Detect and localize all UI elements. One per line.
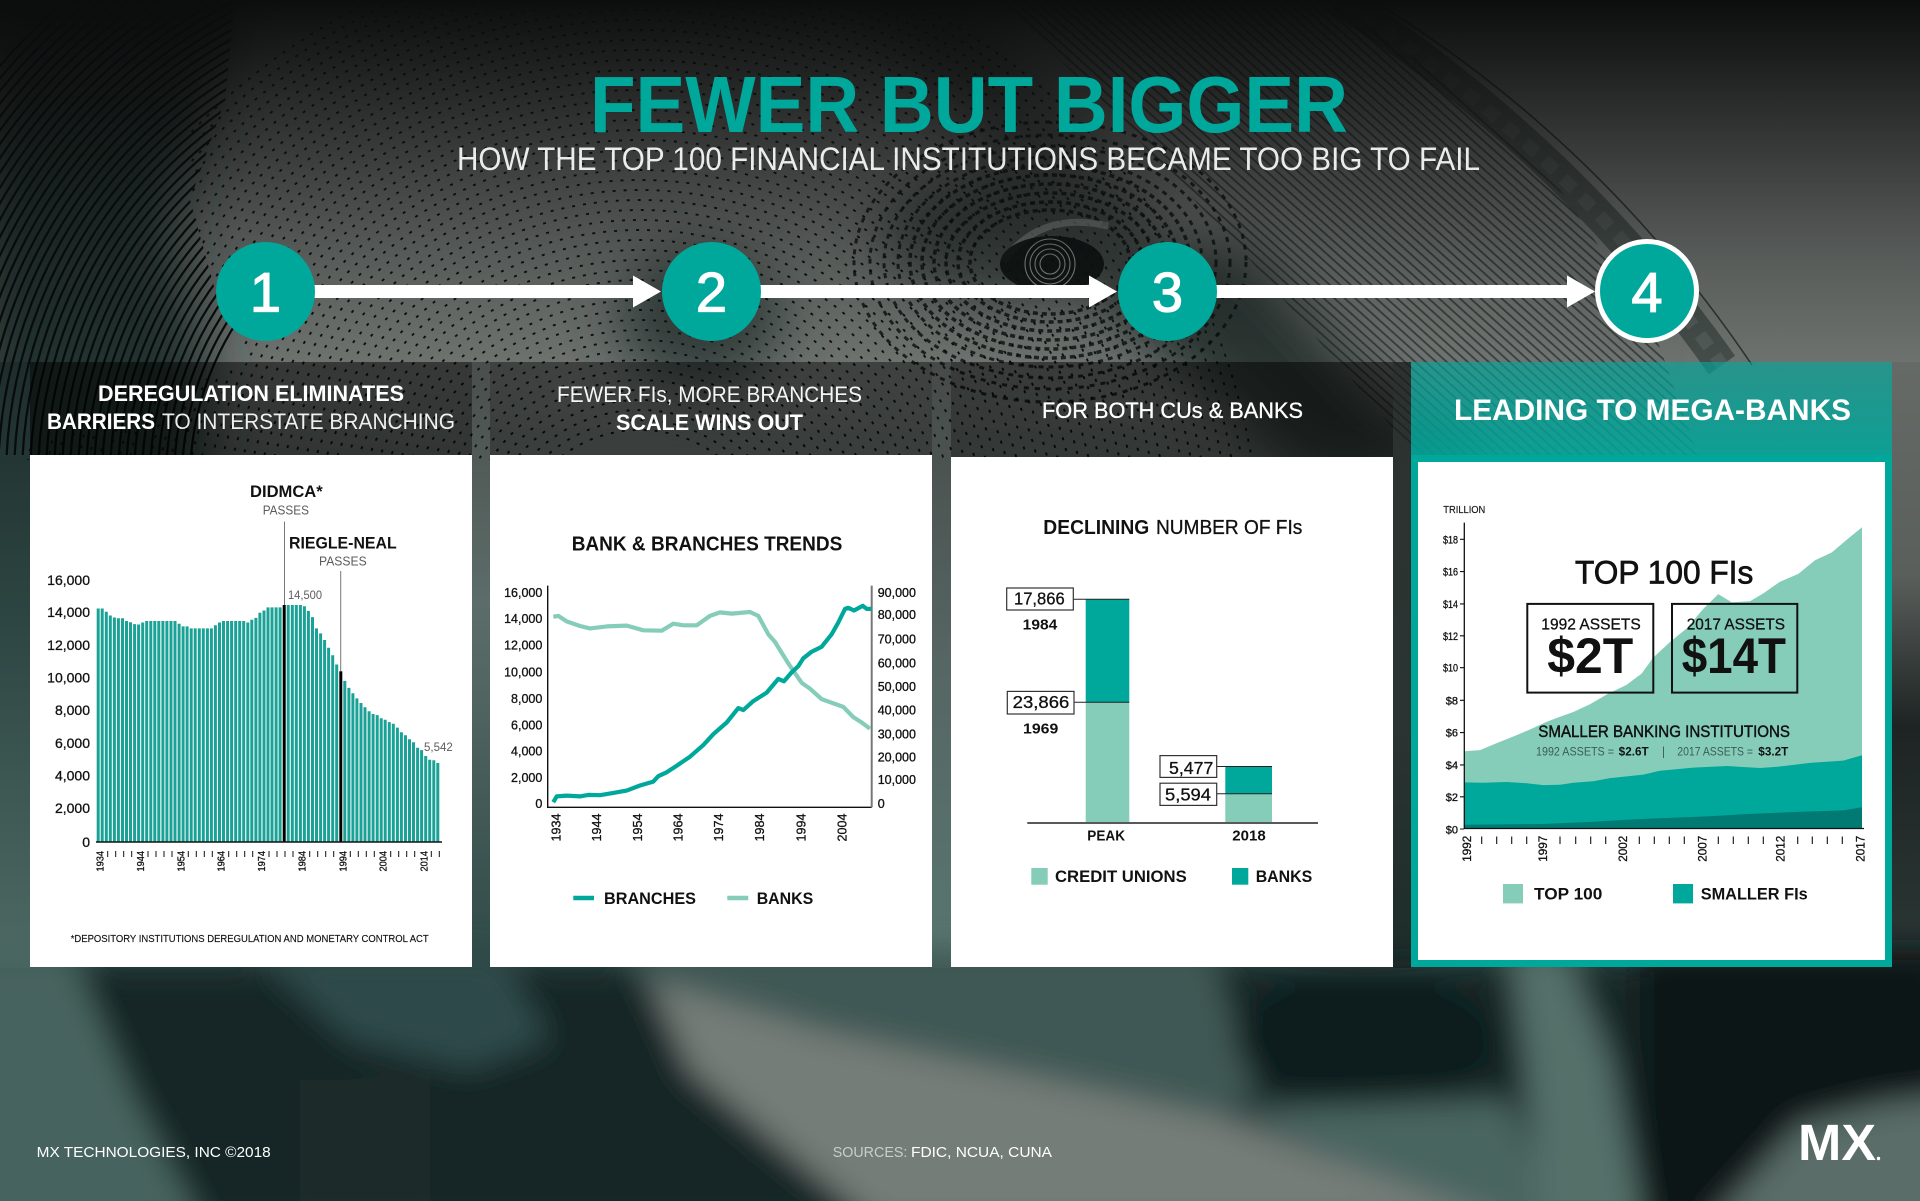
callout: smaller banking institutions: |: [1662, 747, 1665, 759]
step marker 2: 2: [696, 260, 727, 324]
stacked bar chart: declining number of FIs: 5,477: [1169, 758, 1213, 778]
bar chart: number of banks 1934-2018: 1974: [256, 851, 268, 872]
step marker 4: [1598, 242, 1696, 340]
line chart: banks and branches: 1994: [794, 814, 808, 842]
data label: 5,542: 5,542: [424, 740, 453, 754]
stacked bar chart: declining number of FIs: PEAK: [1087, 828, 1125, 844]
bar chart: number of banks 1934-2018: 8,000: [55, 702, 90, 718]
logo: MX: MX: [1798, 1114, 1876, 1171]
line chart: banks and branches: 50,000: [878, 680, 916, 694]
line chart: banks and branches: 0: [535, 797, 542, 811]
chart title: BANK & BRANCHES TRENDS: [572, 534, 842, 556]
line chart: banks and branches: 16,000: [504, 586, 542, 600]
bar chart: number of banks 1934-2018: 1954: [175, 851, 187, 872]
title: FEWER BUT BIGGER: [590, 60, 1348, 149]
line chart: banks and branches: 90,000: [878, 586, 916, 600]
callout: smaller banking institutions: $3.2T: [1758, 747, 1788, 759]
line chart: banks and branches: 14,000: [504, 612, 542, 626]
callout: 2017 assets: $14T: [1682, 628, 1786, 684]
panel 1 heading: DEREGULATION ELIMINATES: [98, 381, 404, 406]
line chart: banks and branches: 60,000: [878, 656, 916, 670]
data label: 14,500: 14,500: [288, 588, 322, 602]
line chart: banks and branches: 12,000: [504, 638, 542, 652]
area chart: assets of top 100 and smaller FIs: 2017: [1854, 835, 1868, 862]
bar chart: number of banks 1934-2018: 10,000: [47, 670, 90, 686]
panel: leading to mega-banks: [1411, 362, 1892, 967]
legend: branches and banks: BANKS: [757, 890, 813, 908]
stacked bar chart: declining number of FIs: 23,866: [1013, 692, 1069, 712]
bar chart: number of banks 1934-2018: 1944: [135, 851, 147, 872]
line chart: banks and branches: 1934: [548, 814, 564, 842]
stacked bar chart: declining number of FIs: 1969: [1023, 721, 1058, 737]
subtitle: HOW THE TOP 100 FINANCIAL INSTITUTIONS BECAME TOO BIG TO FAIL: [457, 141, 1480, 177]
line chart: banks and branches: 1974: [711, 814, 726, 842]
panel 1 heading: BARRIERS: [47, 409, 155, 434]
bar chart: number of banks 1934-2018: 6,000: [55, 735, 90, 751]
line chart: banks and branches: 10,000: [878, 773, 916, 787]
legend: credit unions and banks: BANKS: [1256, 868, 1312, 886]
legend: credit unions and banks: [1031, 868, 1312, 886]
bar chart: number of banks 1934-2018: 12,000: [47, 637, 90, 653]
callout: 1992 assets: 1992 ASSETS: [1541, 616, 1641, 634]
stacked bar chart: declining number of FIs: [1007, 588, 1318, 844]
line chart: banks and branches: 6,000: [511, 718, 542, 732]
callout: smaller banking institutions: [1536, 723, 1790, 759]
panel: fewer FIs, more branches: [490, 362, 932, 967]
callout: DIDMCA passes: DIDMCA*: [250, 483, 323, 501]
bar chart: number of banks 1934-2018: 1994: [337, 851, 349, 872]
stacked bar chart: declining number of FIs: 17,866: [1014, 588, 1065, 608]
stacked bar chart: declining number of FIs: 2018: [1232, 828, 1266, 844]
line chart: banks and branches: 30,000: [878, 728, 916, 742]
area chart: assets of top 100 and smaller FIs: $8: [1446, 695, 1458, 707]
line chart: banks and branches: 1984: [752, 814, 767, 842]
bar chart: number of banks 1934-2018: 1934: [94, 851, 106, 872]
area chart: assets of top 100 and smaller FIs: $12: [1443, 631, 1458, 643]
callout: DIDMCA passes: PASSES: [263, 502, 309, 518]
line chart: banks and branches: 4,000: [511, 744, 542, 758]
area chart: assets of top 100 and smaller FIs: 2007: [1696, 835, 1710, 862]
footer: sources: [833, 1144, 1052, 1161]
bar chart: number of banks 1934-2018: 2004: [378, 851, 390, 872]
bar chart: number of banks 1934-2018: 16,000: [47, 572, 90, 588]
panel: credit unions and banks: [951, 362, 1393, 967]
callout: smaller banking institutions: 2017 ASSETS =: [1677, 747, 1753, 759]
area chart: assets of top 100 and smaller FIs: TRILLION: [1443, 505, 1485, 516]
line chart: banks and branches: 1944: [589, 814, 604, 842]
chart title: NUMBER OF FIs: [1156, 517, 1302, 539]
arrow: step 1 to 2: [314, 276, 661, 308]
bar chart: number of banks 1934-2018: 2014: [418, 851, 430, 872]
footer: sources: SOURCES:: [833, 1144, 907, 1161]
panel 3 heading: FOR BOTH CUs & BANKS: [1042, 398, 1303, 423]
panel 2 heading: [557, 382, 862, 435]
area chart: assets of top 100 and smaller FIs: $6: [1446, 728, 1458, 740]
bar chart: number of banks 1934-2018: 2,000: [55, 800, 90, 816]
area chart: assets of top 100 and smaller FIs: 2012: [1774, 835, 1788, 862]
bar chart: number of banks 1934-2018: 1964: [216, 851, 228, 872]
callout: 1992 assets: $2T: [1547, 628, 1633, 684]
step marker 2: [662, 242, 761, 341]
callout: 1992 assets: [1527, 604, 1653, 693]
panel 4 heading: LEADING TO MEGA-BANKS: [1454, 394, 1851, 427]
line chart: banks and branches: 2004: [834, 814, 850, 842]
legend: top 100 and smaller FIs: TOP 100: [1534, 886, 1602, 904]
chart title: DECLINING: [1043, 517, 1149, 539]
line chart: banks and branches: 2,000: [511, 771, 542, 785]
panel 2 heading: FEWER FIs, MORE BRANCHES: [557, 382, 862, 407]
callout: smaller banking institutions: 1992 ASSETS =: [1536, 747, 1614, 759]
footer: sources: FDIC, NCUA, CUNA: [911, 1144, 1052, 1161]
legend: top 100 and smaller FIs: [1503, 884, 1808, 904]
step marker 1: [216, 242, 315, 341]
area chart: assets of top 100 and smaller FIs: $10: [1443, 663, 1458, 675]
area chart: assets of top 100 and smaller FIs: $2: [1446, 792, 1458, 804]
legend: branches and banks: [573, 890, 813, 908]
line chart: banks and branches: 8,000: [511, 692, 542, 706]
callout: 2017 assets: [1672, 604, 1797, 693]
arrow: step 3 to 4: [1216, 276, 1595, 308]
bar chart: number of banks 1934-2018: [47, 572, 442, 872]
step marker 3: [1118, 242, 1217, 341]
bar chart: number of banks 1934-2018: 1984: [297, 851, 309, 872]
callout: 2017 assets: 2017 ASSETS: [1687, 616, 1785, 634]
area chart: assets of top 100 and smaller FIs: 2002: [1616, 835, 1630, 862]
footer: copyright: MX TECHNOLOGIES, INC ©2018: [37, 1144, 271, 1161]
footnote: *DEPOSITORY INSTITUTIONS DEREGULATION AND MONETARY CONTROL ACT: [71, 933, 429, 945]
stacked bar chart: declining number of FIs: 1984: [1023, 618, 1057, 634]
area chart: assets of top 100 and smaller FIs: $0: [1446, 824, 1458, 836]
area chart: assets of top 100 and smaller FIs: $18: [1443, 534, 1458, 546]
arrow: step 2 to 3: [760, 276, 1117, 308]
line chart: banks and branches: 20,000: [878, 750, 916, 764]
callout: DIDMCA passes: [250, 483, 323, 605]
area chart: assets of top 100 and smaller FIs: $4: [1446, 760, 1458, 772]
line chart: banks and branches: 40,000: [878, 704, 916, 718]
line chart: banks and branches: 1964: [670, 814, 686, 842]
line chart: banks and branches: 80,000: [878, 608, 916, 622]
area chart: assets of top 100 and smaller FIs: $14: [1443, 599, 1458, 611]
step marker 3: 3: [1152, 260, 1183, 324]
line chart: banks and branches: 0: [878, 797, 885, 811]
callout: smaller banking institutions: $2.6T: [1619, 747, 1649, 759]
callout: Riegle-Neal passes: [289, 535, 397, 671]
area chart: assets of top 100 and smaller FIs: 1997: [1536, 835, 1550, 862]
step marker 1: 1: [250, 260, 281, 324]
panel 2 heading: SCALE WINS OUT: [616, 410, 804, 435]
stacked bar chart: declining number of FIs: 5,594: [1165, 785, 1211, 805]
step marker 4: 4: [1631, 260, 1663, 324]
panel: deregulation: [30, 362, 472, 967]
bar chart: number of banks 1934-2018: 0: [82, 834, 90, 850]
legend: branches and banks: BRANCHES: [604, 890, 696, 908]
panel 1 heading: TO INTERSTATE BRANCHING: [162, 409, 455, 434]
chart title: [1043, 517, 1302, 539]
line chart: banks and branches: 1954: [630, 814, 645, 842]
line chart: banks and branches: [504, 586, 916, 842]
callout: Riegle-Neal passes: RIEGLE-NEAL: [289, 535, 397, 553]
callout: Riegle-Neal passes: PASSES: [319, 553, 367, 568]
legend: credit unions and banks: CREDIT UNIONS: [1055, 868, 1187, 886]
line chart: banks and branches: 10,000: [504, 666, 542, 680]
line chart: banks and branches: 70,000: [878, 632, 916, 646]
chart heading: top 100 FIs: TOP 100 FIs: [1575, 555, 1753, 591]
bar chart: number of banks 1934-2018: 4,000: [55, 768, 90, 784]
area chart: assets of top 100 and smaller FIs: [1443, 505, 1868, 862]
bar chart: number of banks 1934-2018: 14,000: [47, 604, 90, 620]
area chart: assets of top 100 and smaller FIs: 1992: [1460, 835, 1474, 862]
panel 1 heading: [47, 381, 455, 434]
legend: top 100 and smaller FIs: SMALLER FIs: [1701, 886, 1808, 904]
callout: smaller banking institutions: SMALLER BANKING INSTITUTIONS: [1538, 723, 1790, 741]
area chart: assets of top 100 and smaller FIs: $16: [1443, 567, 1458, 579]
